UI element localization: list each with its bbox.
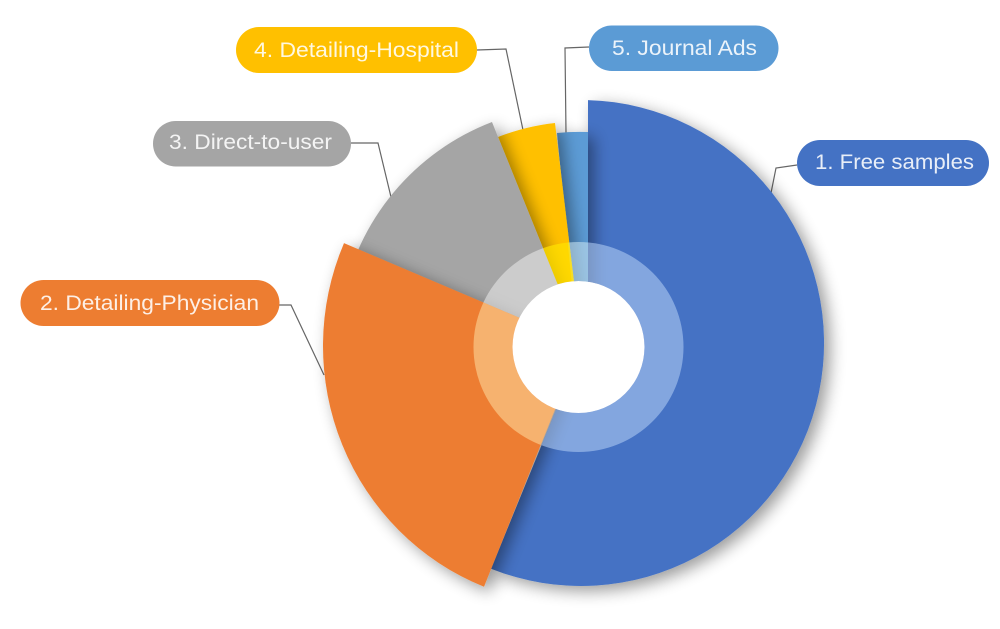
wedge: free samples [491,100,824,586]
wedge: direct-to-user [342,122,583,347]
label: 1. Free samples [797,140,989,186]
leader lines [279,47,797,375]
wedge: detailing-physician [323,243,581,587]
leader: direct-to-user [351,143,391,197]
ring segment: gray [484,248,558,318]
ring segment: blue [542,242,684,452]
label: 2. Detailing-Physician: 2. Detailing-Physician [40,292,259,315]
label: 5. Journal Ads [589,26,778,71]
center hole [512,281,644,413]
wedge: detailing-hospital [498,123,583,347]
label: 4. Detailing-Hospital: 4. Detailing-Hospital [254,39,459,62]
pie chart [323,100,824,587]
ring segment: orange [474,302,555,445]
label: 3. Direct-to-user: 3. Direct-to-user [169,131,332,154]
label: 2. Detailing-Physician [20,280,280,326]
leader: detailing-hospital [477,49,523,130]
inner ring highlight [470,240,690,460]
leader: free samples [771,165,797,193]
label: 3. Direct-to-user [153,121,351,166]
ring segment: yellow [543,242,574,284]
leader: detailing-physician [279,305,324,375]
ring segment: light blue [568,242,588,282]
label: 4. Detailing-Hospital [236,27,477,73]
label: 5. Journal Ads: 5. Journal Ads [612,37,757,60]
leader: journal ads [565,47,589,133]
label: 1. Free samples: 1. Free samples [815,151,974,174]
wedge: journal ads [557,132,588,347]
